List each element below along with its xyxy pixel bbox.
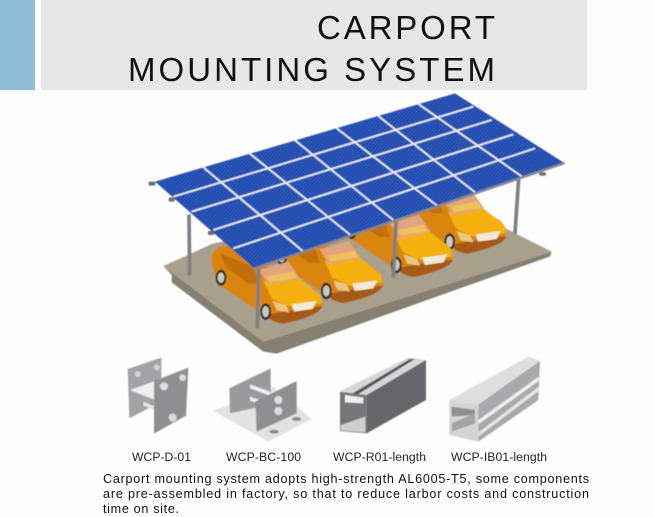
part: WCP-IB01-length	[449, 357, 540, 442]
rail ends	[149, 172, 546, 235]
support posts	[189, 178, 519, 328]
part labels: WCP-IB01-length	[451, 450, 547, 464]
description paragraph: time on site.	[103, 502, 179, 516]
grey title panel	[41, 0, 587, 90]
title	[128, 9, 495, 88]
cars	[212, 176, 506, 324]
description paragraph: Carport mounting system adopts high-strength AL6005-T5, some components	[103, 472, 589, 486]
part: WCP-BC-100	[213, 368, 312, 442]
part: WCP-R01-length	[340, 358, 426, 433]
part: WCP-D-01	[128, 358, 188, 434]
blue header tab	[0, 0, 35, 90]
part labels: WCP-BC-100	[226, 450, 301, 464]
title: MOUNTING SYSTEM	[128, 51, 495, 88]
description paragraph	[103, 472, 589, 516]
part labels: WCP-D-01	[132, 450, 191, 464]
title: CARPORT	[317, 9, 495, 46]
part labels: WCP-R01-length	[333, 450, 426, 464]
solar panel array	[155, 93, 565, 269]
mounting components	[128, 357, 540, 442]
description paragraph: are pre-assembled in factory, so that to reduce larbor costs and construction	[103, 487, 589, 501]
part labels	[132, 450, 547, 464]
concrete ground slab	[163, 202, 552, 354]
carport illustration	[149, 93, 565, 354]
